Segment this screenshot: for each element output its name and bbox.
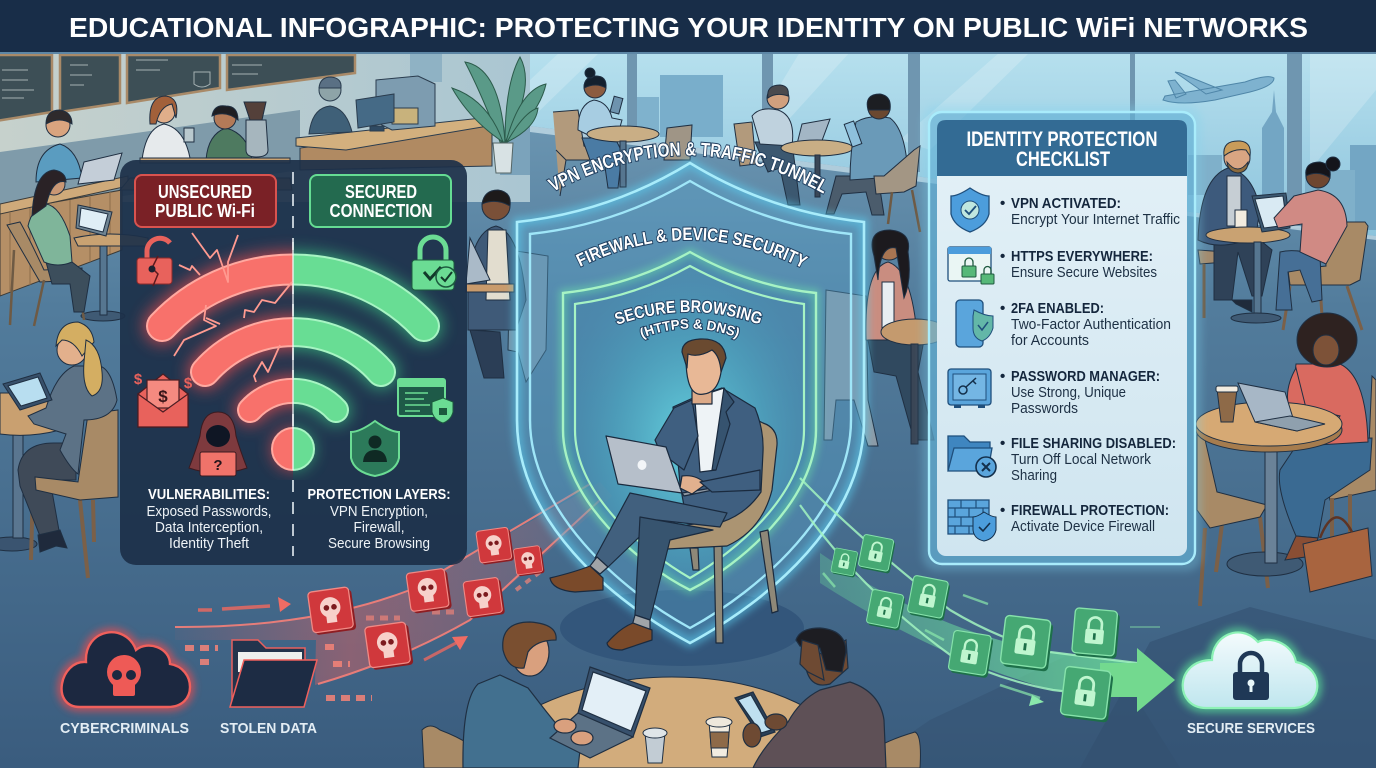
seated woman top centre [553, 68, 692, 196]
icon: secure browser [398, 379, 453, 423]
icon: firewall with shield [948, 500, 996, 541]
checklist item: password manager: Passwords [1011, 401, 1078, 417]
encrypted lock packets [830, 534, 1120, 723]
text: vulnerabilities: VULNERABILITIES: [148, 486, 270, 503]
text: vulnerabilities: Identity Theft [169, 536, 249, 552]
text: protection layers [308, 486, 450, 552]
label: secure services: SECURE SERVICES [1187, 720, 1315, 737]
chalk menu lines [2, 60, 262, 98]
airplane [1163, 72, 1274, 103]
icon: broken padlock [137, 238, 172, 286]
checklist item: password manager: PASSWORD MANAGER: [1011, 368, 1160, 385]
green secure stream [800, 478, 1175, 712]
icon: folder with cross [948, 436, 996, 477]
label: secured connection: CONNECTION [330, 201, 432, 221]
checklist item: 2fa: Two-Factor Authentication [1011, 317, 1171, 333]
shield layers [517, 163, 864, 643]
label: unsecured public wifi [135, 175, 276, 227]
checklist item: file sharing: FILE SHARING DISABLED: [1011, 435, 1176, 452]
text: vulnerabilities [146, 486, 272, 552]
central man on laptop [550, 339, 778, 650]
shield layer label: VPN: VPN ENCRYPTION & TRAFFIC TUNNEL [546, 141, 826, 195]
icon: secure services cloud [1183, 632, 1317, 708]
coffee counter [296, 76, 500, 170]
checklist item: file sharing: Turn Off Local Network [1011, 452, 1152, 468]
shield layer label: secure browsing: SECURE BROWSING [614, 299, 762, 325]
checklist item: https: • [1000, 248, 1005, 265]
icon: phishing envelope: $ [184, 375, 193, 392]
checklist item: password manager: • [1000, 368, 1005, 385]
checklist heading: IDENTITY PROTECTION [966, 128, 1158, 151]
checklist item: file sharing: Sharing [1011, 468, 1057, 484]
text: protection layers: Secure Browsing [328, 536, 430, 552]
checklist item: vpn: • [1000, 195, 1005, 212]
right bottom chair [850, 732, 920, 768]
right seated man with phone [735, 628, 886, 768]
icon: padlock with check [412, 237, 456, 290]
label: secured connection: SECURED [345, 182, 417, 202]
checklist item: firewall: FIREWALL PROTECTION: [1011, 502, 1169, 519]
wifi symbol, red half [133, 240, 293, 480]
chalkboards [0, 55, 355, 121]
arrow: stolen data flow [198, 597, 468, 660]
checklist item: 2fa [1000, 300, 1171, 349]
text: protection layers: VPN Encryption, [330, 504, 428, 520]
icon: cybercriminals cloud [62, 632, 190, 707]
checklist item: vpn [1000, 195, 1180, 228]
icon: password safe [948, 369, 991, 408]
checklist item: password manager [1000, 368, 1160, 417]
baristas and customers [36, 96, 290, 184]
round table [530, 677, 830, 768]
checklist heading [966, 128, 1158, 171]
woman in green at laptop [7, 170, 148, 326]
checklist item: firewall: • [1000, 502, 1005, 519]
seated woman right of shield [824, 230, 949, 446]
label: stolen data: STOLEN DATA [220, 720, 317, 737]
checklist item: https [1000, 248, 1157, 281]
icon: stolen data folder [230, 640, 317, 707]
label: cybercriminals: CYBERCRIMINALS [60, 720, 189, 737]
checklist item: 2fa: 2FA ENABLED: [1011, 300, 1104, 317]
icon: phishing envelope: $ [158, 387, 168, 406]
label: unsecured public wifi: PUBLIC Wi-Fi [155, 201, 255, 221]
left counter [0, 176, 292, 296]
bottom table with two men [560, 590, 804, 666]
icon: hooded hacker: ? [213, 457, 223, 474]
icon: vpn shield [951, 188, 989, 232]
icon: identity shield [351, 421, 399, 476]
icon: phone with shield [956, 300, 993, 347]
man behind left panel [466, 190, 548, 382]
lightning cracks [174, 233, 292, 382]
shield layer label: firewall: FIREWALL & DEVICE SECURITY [574, 226, 810, 268]
woman in red, lower right [1196, 313, 1376, 606]
checklist heading: CHECKLIST [1016, 148, 1110, 171]
icon: hooded hacker [189, 412, 247, 476]
checklist item: password manager: Use Strong, Unique [1011, 385, 1126, 401]
shield layer label: https and dns: (HTTPS & DNS) [640, 318, 740, 341]
panel: identity protection checklist [922, 105, 1202, 571]
bearded man and woman at right table [1198, 141, 1368, 330]
title banner: EDUCATIONAL INFOGRAPHIC: PROTECTING YOUR IDENTITY ON PUBLIC WiFi NETWORKS [69, 12, 1308, 43]
checklist item: https: Ensure Secure Websites [1011, 265, 1157, 281]
label: unsecured public wifi: UNSECURED [158, 182, 252, 202]
checklist item: https: HTTPS EVERYWHERE: [1011, 248, 1153, 265]
coffee cups [643, 717, 732, 763]
woman with tablet, lower left [0, 322, 118, 578]
label: secured connection [310, 175, 451, 227]
checklist item: 2fa: for Accounts [1011, 333, 1089, 349]
red attack stream [175, 482, 612, 698]
checklist item: vpn: Encrypt Your Internet Traffic [1011, 212, 1180, 228]
text: protection layers: Firewall, [354, 520, 404, 536]
checklist item: vpn: VPN ACTIVATED: [1011, 195, 1121, 212]
checklist item: firewall: Activate Device Firewall [1011, 519, 1155, 535]
panel: unsecured versus secured comparison [120, 160, 467, 565]
text: vulnerabilities: Data Interception, [155, 520, 263, 536]
checklist item: 2fa: • [1000, 300, 1005, 317]
left seated man with laptop [463, 622, 650, 768]
icon: phishing envelope: $ [134, 371, 143, 388]
checklist item: firewall [1000, 502, 1169, 535]
wifi symbol, green half [293, 241, 451, 479]
checklist item: file sharing: • [1000, 435, 1005, 452]
icon: https browser [948, 247, 994, 284]
icon: phishing envelope [134, 371, 193, 427]
text: vulnerabilities: Exposed Passwords, [146, 504, 272, 520]
skull data packets [307, 527, 545, 671]
left bottom chair [422, 726, 493, 768]
title banner [0, 0, 1376, 54]
plant [452, 57, 546, 173]
text: protection layers: PROTECTION LAYERS: [308, 486, 450, 503]
checklist item: file sharing [1000, 435, 1176, 484]
two men at top table [734, 85, 920, 232]
